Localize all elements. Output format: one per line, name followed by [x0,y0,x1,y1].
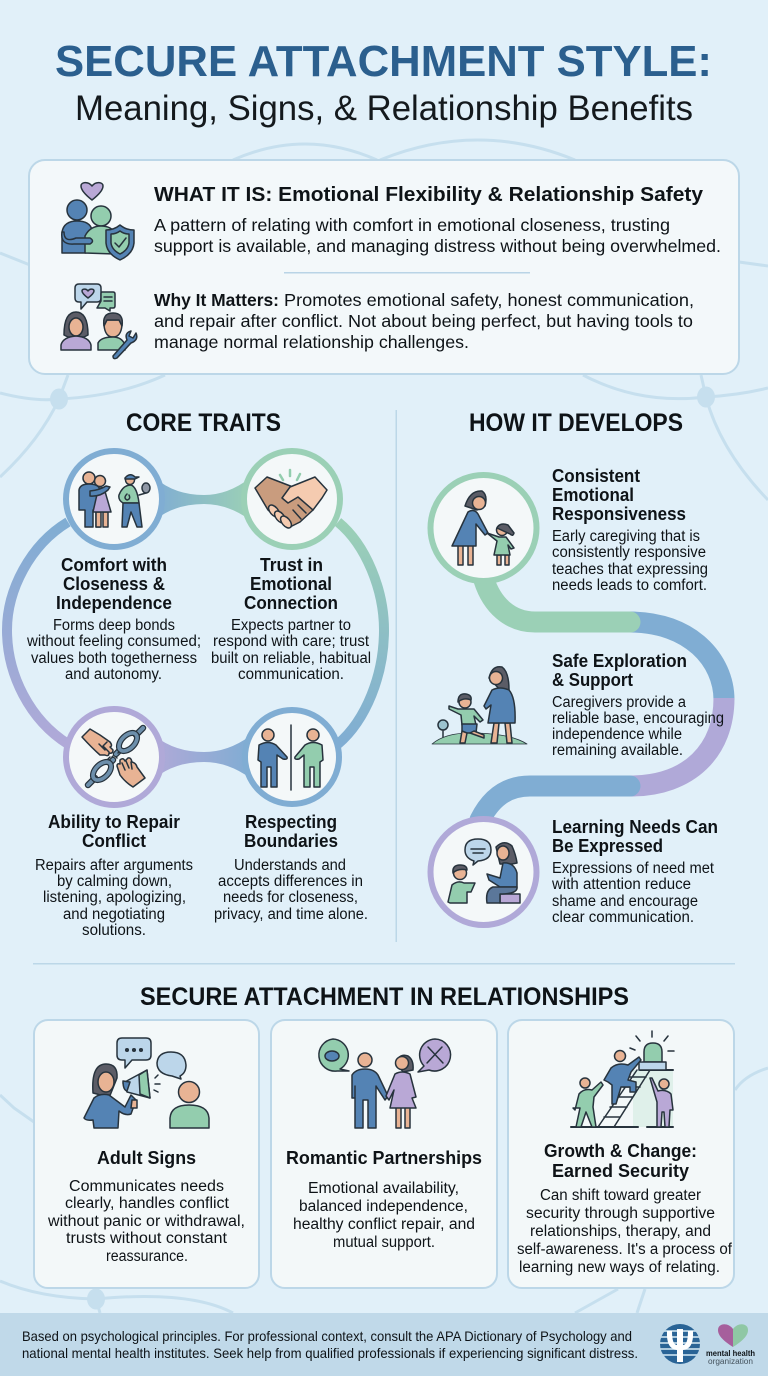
text: adult signs: clearly, handles conflict [65,1195,230,1212]
text: safe exploration: Caregivers provide a [552,694,686,711]
text: ability to repair conflict: solutions. [82,922,146,939]
text: consistent emotional responsiveness: teaches that expressing [552,561,708,578]
text: comfort with closeness: Comfort with [61,554,167,575]
text: adult signs: trusts without constant [66,1230,228,1247]
text: growth and change [517,1140,733,1276]
diagram: development path [480,580,724,820]
text: definition: A pattern of relating with comfort in emotional closeness, trusting [154,215,670,235]
text: respecting boundaries: accepts differences in [218,873,363,890]
text: growth and change: Growth & Change: [544,1140,697,1161]
text: why it matters: manage normal relationship challenges. [154,332,469,352]
step: learning needs can be expressed [430,816,718,926]
text: trust in emotional connection: Connection [244,592,338,613]
text: learning needs [551,816,718,926]
text: trust in emotional connection: communication. [238,666,344,683]
text: comfort with closeness: values both togetherness [31,650,197,667]
text: ability to repair conflict [35,811,193,939]
title: SECURE ATTACHMENT STYLE: [55,37,712,86]
icon: woman with megaphone [84,1038,209,1128]
text: trust in emotional connection: respond with care; trust [213,633,370,650]
trait: trust in emotional connection [244,451,340,547]
icon: hands mending a chain [82,728,145,787]
text: growth and change: Earned Security [552,1160,690,1181]
text: comfort with closeness: and autonomy. [65,666,162,683]
footer text: national mental health institutes. Seek help from qualified professionals if experiencing significant distress. [22,1345,638,1361]
text: growth and change: self-awareness. It's a process of [517,1241,733,1258]
footer text: Based on psychological principles. For professional context, consult the APA Dictionary of Psychology and [22,1328,632,1344]
text: why it matters [154,290,694,352]
text: comfort with closeness [26,554,201,683]
text: adult signs: without panic or withdrawal, [47,1213,245,1230]
logo: mental health organization: mental health [706,1348,755,1358]
text: romantic partnerships [286,1147,482,1251]
trait: comfort with closeness [66,451,162,547]
text: romantic partnerships: Emotional availability, [308,1180,459,1197]
text: consistent emotional responsiveness: Early caregiving that is [552,528,700,545]
text: romantic partnerships: balanced independence, [299,1198,468,1215]
logo: mental health organization: organization [708,1357,753,1366]
text: comfort with closeness: without feeling consumed; [26,633,201,650]
heading: what it is: WHAT IT IS: Emotional Flexibility & Relationship Safety [154,183,704,206]
text: ability to repair conflict: Conflict [82,830,146,851]
text: romantic partnerships: healthy conflict repair, and [293,1216,475,1233]
text: growth and change: learning new ways of relating. [519,1259,720,1276]
text: learning needs: Learning Needs Can [552,816,718,837]
title [55,37,712,128]
icon: two people separated by a line [258,725,323,790]
icon: embracing couple with shield [62,183,134,260]
footer [0,1313,768,1376]
text: respecting boundaries [214,811,368,923]
text: consistent emotional responsiveness: Emotional [552,484,634,505]
text: respecting boundaries: Respecting [245,811,337,832]
text: ability to repair conflict: listening, apologizing, [43,889,186,906]
icon: family embracing [79,472,150,527]
text: learning needs: clear communication. [552,909,694,926]
text: definition: support is available, and managing distress without being overwhelmed. [154,236,721,256]
heading: secure attachment in relationships: SECURE ATTACHMENT IN RELATIONSHIPS [140,983,629,1011]
diagram: core traits ring [7,478,384,778]
text: consistent emotional responsiveness [552,465,708,594]
icon: couple holding hands with speech bubbles [319,1039,451,1128]
logo: psi emblem [660,1324,700,1364]
icon: conversation and repair [61,284,137,359]
text: growth and change: relationships, therapy, and [530,1223,711,1240]
text: trust in emotional connection: built on reliable, habitual [211,650,371,667]
text: adult signs: reassurance. [106,1248,188,1265]
text: trust in emotional connection [211,554,371,683]
text: learning needs: Expressions of need met [552,860,715,877]
text: respecting boundaries: privacy, and time alone. [214,906,368,923]
text: trust in emotional connection: Trust in [260,554,323,575]
text: consistent emotional responsiveness: Consistent [552,465,640,486]
icon: child talking to seated caregiver [448,839,520,903]
text: consistent emotional responsiveness: consistently responsive [552,544,706,561]
footer text [22,1328,638,1361]
text: growth and change: Can shift toward greater [540,1187,701,1204]
title: Meaning, Signs, & Relationship Benefits [75,89,693,128]
text: why it matters: Why It Matters: [154,290,279,310]
text: ability to repair conflict: and negotiating [63,906,165,923]
text: ability to repair conflict: Ability to Repair [48,811,180,832]
text: respecting boundaries: needs for closeness, [223,889,358,906]
text: growth and change: security through supportive [526,1205,715,1222]
text: respecting boundaries: Boundaries [244,830,338,851]
card: adult signs [34,1020,259,1288]
card: romantic partnerships [271,1020,497,1288]
text: learning needs: with attention reduce [551,876,691,893]
text: adult signs: Communicates needs [69,1178,224,1195]
trait: ability to repair conflict [66,709,162,805]
heading: how it develops: HOW IT DEVELOPS [469,409,683,437]
text: safe exploration: independence while [552,726,682,743]
trait: respecting boundaries [245,710,339,804]
text: safe exploration: reliable base, encouraging [552,710,724,727]
card: growth and change [508,1020,734,1288]
text: safe exploration: Safe Exploration [552,650,687,671]
text: ability to repair conflict: by calming down, [57,873,172,890]
panel: what it is [29,160,739,374]
text: romantic partnerships: Romantic Partnerships [286,1147,482,1168]
step: safe exploration [432,650,724,759]
text: ability to repair conflict: Repairs after arguments [35,857,193,874]
text: comfort with closeness: Forms deep bonds [53,617,175,634]
text: comfort with closeness: Independence [56,592,172,613]
text: safe exploration [552,650,724,759]
text: romantic partnerships: mutual support. [333,1234,435,1251]
text: consistent emotional responsiveness: needs leads to comfort. [552,577,707,594]
text: comfort with closeness: Closeness & [63,573,165,594]
logo: mental health organization [706,1324,755,1366]
icon: mother holding child's hand [452,491,514,565]
step: consistent emotional responsiveness [430,475,536,581]
text: adult signs: Adult Signs [97,1147,196,1168]
text: learning needs: Be Expressed [552,835,663,856]
text: why it matters: Promotes emotional safety, honest communication, [284,290,694,310]
text: adult signs [47,1147,245,1265]
icon: child exploring near caregiver [432,667,527,744]
text: trust in emotional connection: Expects partner to [231,617,351,634]
icon: people climbing a ladder to a beacon [571,1031,674,1127]
text: safe exploration: & Support [552,669,633,690]
text: respecting boundaries: Understands and [234,857,346,874]
text: why it matters: and repair after conflict. Not about being perfect, but having tools to [154,311,693,331]
heading: core traits: CORE TRAITS [126,409,281,437]
text: safe exploration: remaining available. [552,742,683,759]
text: learning needs: shame and encourage [552,893,698,910]
text: trust in emotional connection: Emotional [250,573,332,594]
text: consistent emotional responsiveness: Responsiveness [552,503,686,524]
text: definition [154,215,721,256]
icon: handshake [255,470,327,530]
